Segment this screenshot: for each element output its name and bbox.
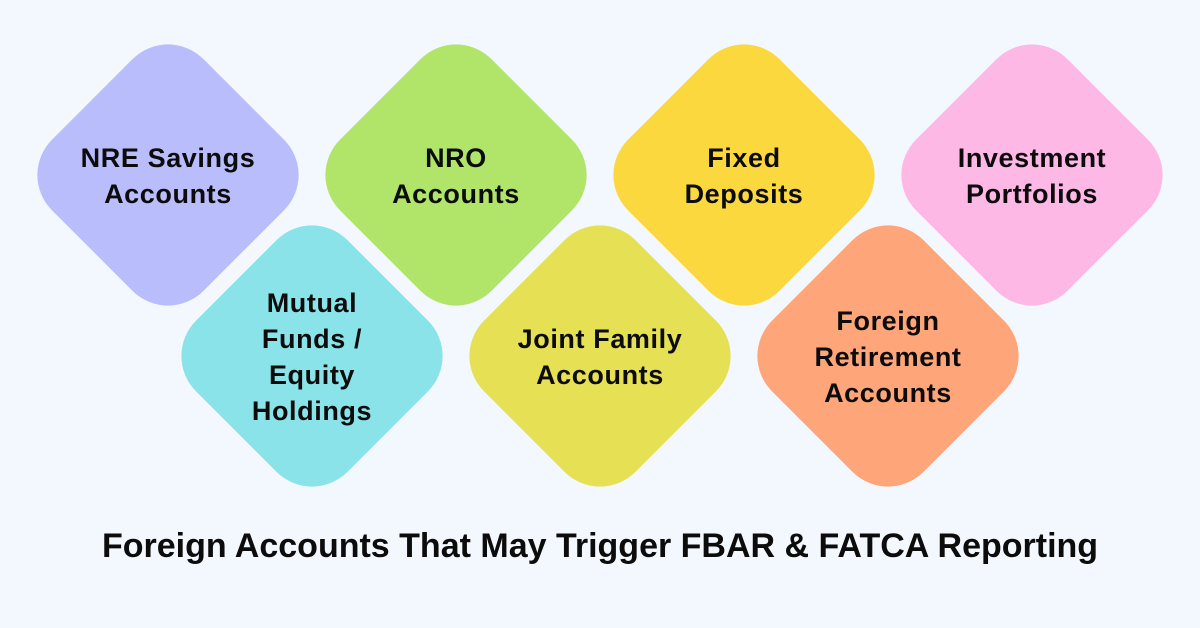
diamond: NRO Accounts xyxy=(325,44,587,306)
diamond: NRO Accounts: Accounts xyxy=(392,179,520,209)
diamond: Foreign Retirement Accounts: Accounts xyxy=(824,378,952,408)
diamond: Mutual Funds / Equity Holdings xyxy=(181,225,443,487)
diamond: Fixed Deposits: Fixed xyxy=(707,143,781,173)
diamond: NRE Savings Accounts xyxy=(37,44,299,306)
diamond: Mutual Funds / Equity Holdings: Mutual xyxy=(267,288,357,318)
title: Foreign Accounts That May Trigger FBAR & FATCA Reporting xyxy=(102,527,1098,565)
diamond: NRE Savings Accounts: NRE Savings xyxy=(81,143,255,173)
diamond: Mutual Funds / Equity Holdings: Equity xyxy=(269,360,355,390)
diamond: Investment Portfolios xyxy=(901,44,1163,306)
diamond: Foreign Retirement Accounts: Retirement xyxy=(814,342,962,372)
diamond: NRO Accounts: NRO xyxy=(425,143,487,173)
diamond: NRE Savings Accounts: Accounts xyxy=(104,179,232,209)
diamond: Mutual Funds / Equity Holdings: Funds / xyxy=(262,324,362,354)
diamond: Investment Portfolios: Investment xyxy=(958,143,1106,173)
diamond: Foreign Retirement Accounts: Foreign xyxy=(836,306,940,336)
diamond: Joint Family Accounts: Accounts xyxy=(536,360,664,390)
diamond: Fixed Deposits: Deposits xyxy=(685,179,803,209)
diamond: Joint Family Accounts xyxy=(469,225,731,487)
diamond: Mutual Funds / Equity Holdings: Holdings xyxy=(252,396,372,426)
diamond: Foreign Retirement Accounts xyxy=(757,225,1019,487)
diamond: Fixed Deposits xyxy=(613,44,875,306)
diamond: Joint Family Accounts: Joint Family xyxy=(518,324,682,354)
diamond: Investment Portfolios: Portfolios xyxy=(966,179,1098,209)
